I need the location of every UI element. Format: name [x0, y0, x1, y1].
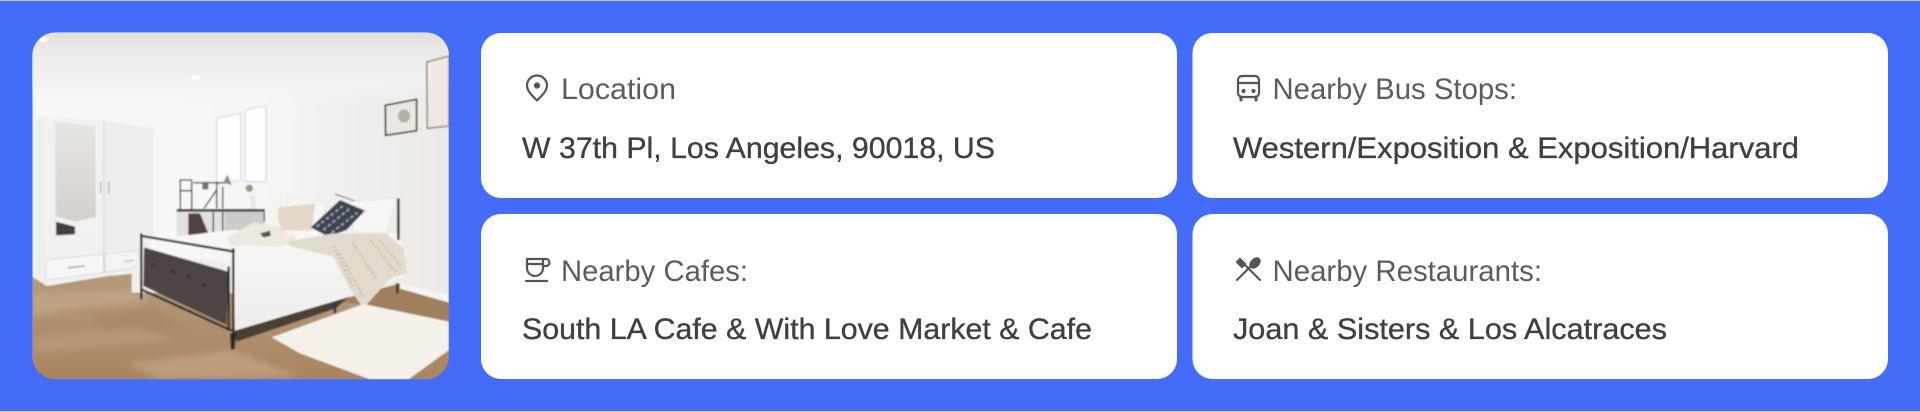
wardrobe	[36, 118, 44, 282]
bed mattress and duvet	[130, 260, 234, 294]
throw	[287, 233, 407, 308]
headboard	[335, 198, 398, 313]
wall frames	[385, 99, 417, 135]
panel: nearby restaurants	[1192, 214, 1888, 379]
floor	[32, 273, 449, 379]
cafes list: South LA Cafe & With Love Market & Cafe	[522, 313, 1092, 346]
pillows	[280, 198, 327, 230]
icon: bus	[1238, 76, 1259, 100]
icon: crossed fork and spoon	[1237, 257, 1261, 280]
panel: location	[481, 33, 1177, 198]
heading: cafes: Nearby Cafes:	[561, 255, 748, 288]
heading: restaurants: Nearby Restaurants:	[1272, 255, 1542, 288]
restaurants list: Joan & Sisters & Los Alcatraces	[1233, 313, 1667, 346]
desk	[177, 210, 265, 236]
panel: nearby bus stops	[1192, 33, 1888, 198]
address: W 37th Pl, Los Angeles, 90018, US	[522, 132, 995, 165]
icon: map pin	[527, 76, 547, 100]
panel: bedroom photo	[20, 20, 463, 379]
footboard	[143, 247, 228, 325]
rug	[272, 304, 449, 379]
icon: coffee cup	[526, 259, 550, 281]
panel: nearby cafes	[481, 214, 1177, 379]
window	[217, 113, 241, 184]
heading: bus stops: Nearby Bus Stops:	[1272, 73, 1517, 106]
bus stops list: Western/Exposition & Exposition/Harvard	[1233, 132, 1799, 165]
heading: location: Location	[561, 73, 676, 106]
